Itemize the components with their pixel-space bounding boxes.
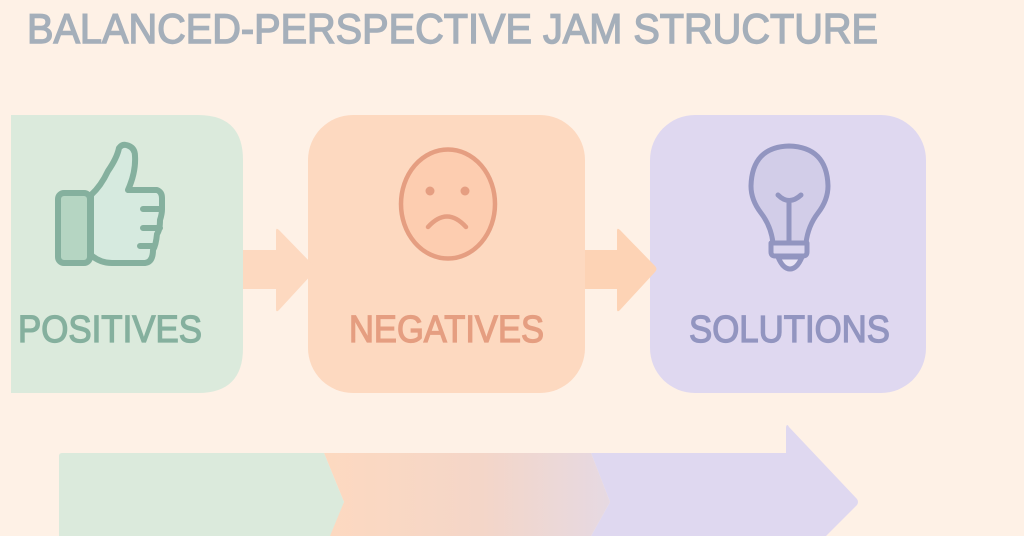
title: BALANCED-PERSPECTIVE JAM STRUCTURE [27,5,878,52]
segment: solutions [591,425,858,536]
icon: thumbs up [58,145,162,263]
timeline arrow [59,425,858,536]
label: negatives: NEGATIVES [349,309,544,351]
icon: light bulb [751,146,828,269]
icon: sad face [401,150,495,258]
segment: negatives [324,453,610,536]
arrow: positives to negatives [243,229,316,311]
panel: solutions [650,115,926,393]
panel: positives [11,115,243,393]
label: positives: POSITIVES [18,309,202,351]
panel: negatives [308,115,585,393]
label: solutions: SOLUTIONS [689,309,890,351]
arrow: negatives to solutions [585,229,656,311]
segment: positives [59,453,344,536]
